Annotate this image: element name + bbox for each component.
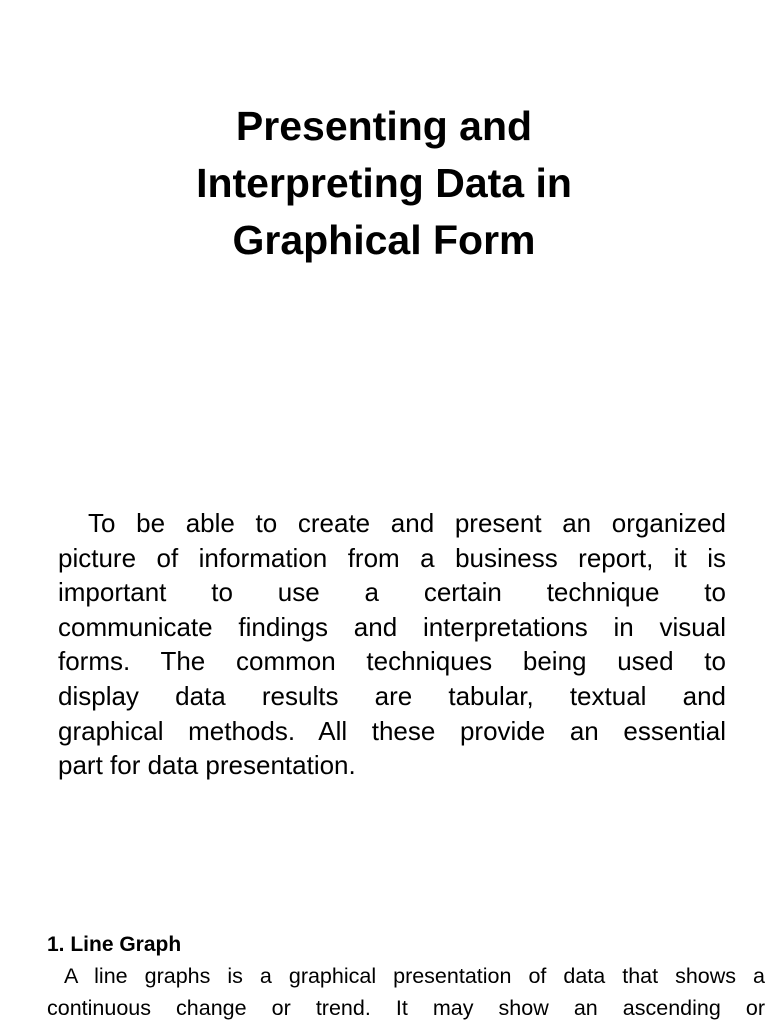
line graph text (47, 964, 765, 1020)
intro paragraph: To be able to create and present an organized (88, 508, 726, 538)
intro paragraph: important to use a certain technique to (58, 577, 726, 607)
intro paragraph: picture of information from a business report, it is (58, 543, 726, 573)
line graph text: continuous change or trend. It may show an ascending or (47, 996, 765, 1020)
heading: line graph: 1. Line Graph (47, 933, 181, 956)
intro paragraph: part for data presentation. (58, 750, 356, 780)
intro paragraph: graphical methods. All these provide an essential (58, 716, 726, 746)
title: Graphical Form (232, 217, 536, 263)
title (196, 103, 572, 263)
intro paragraph: display data results are tabular, textual and (58, 681, 726, 711)
line graph text: A line graphs is a graphical presentation of data that shows a (64, 964, 765, 988)
title: Presenting and (236, 103, 532, 149)
intro paragraph (58, 508, 726, 780)
intro paragraph: communicate findings and interpretations in visual (58, 612, 726, 642)
title: Interpreting Data in (196, 160, 572, 206)
intro paragraph: forms. The common techniques being used to (58, 646, 726, 676)
